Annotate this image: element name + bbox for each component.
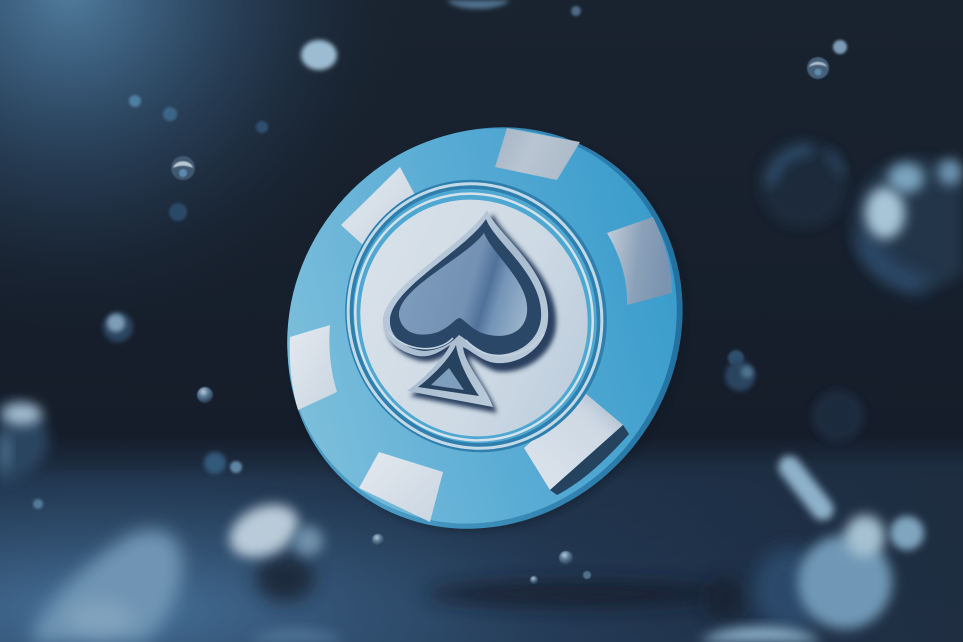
center face — [327, 168, 621, 468]
blurred spheres, upper area — [129, 0, 847, 221]
poker chip — [206, 47, 765, 611]
dark glass sphere, upper right — [759, 140, 847, 228]
spade metal fill — [399, 233, 527, 336]
spade emblem — [383, 210, 556, 413]
large sphere, right edge — [852, 158, 963, 290]
dark notch beside lower right stripe — [550, 425, 629, 495]
lobe highlight, right — [466, 334, 544, 356]
edge stripes — [290, 128, 672, 522]
spade shadow — [387, 214, 556, 413]
lobe highlight, left — [389, 332, 453, 349]
spade dark band — [390, 219, 541, 355]
blurred droplets, left and right — [103, 312, 864, 474]
spade stem metal — [431, 368, 464, 390]
chip top face — [207, 49, 757, 603]
floor shadow under chip — [425, 580, 725, 608]
spade chrome outline — [383, 210, 548, 407]
spade stem inner — [418, 345, 479, 396]
small sharp droplets — [33, 57, 829, 584]
white inner ring — [321, 160, 627, 474]
foreground blurred objects, bottom left — [32, 494, 345, 642]
chip edge — [206, 47, 764, 609]
foreground blurred objects, bottom right — [700, 451, 924, 642]
left edge sphere — [0, 403, 48, 485]
chip shadow — [213, 53, 765, 611]
recessed ring — [307, 143, 645, 489]
